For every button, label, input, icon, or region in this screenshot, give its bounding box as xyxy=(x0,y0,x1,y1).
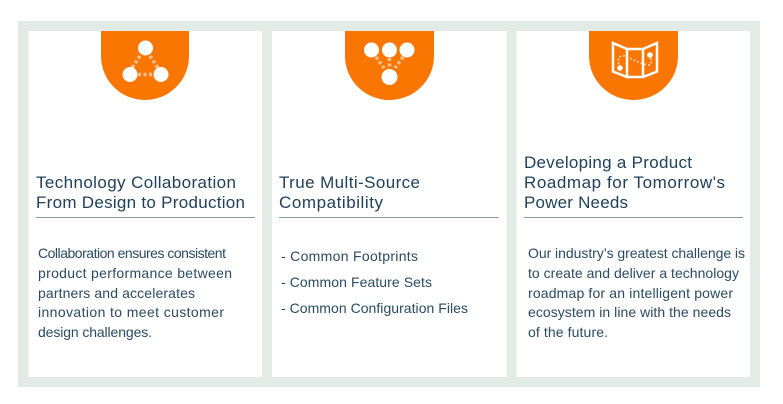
panel: technology collaboration xyxy=(28,31,262,377)
bullet list: - Common Footprints xyxy=(281,248,418,264)
icon: folded map xyxy=(589,31,678,100)
heading: Roadmap for Tomorrow's xyxy=(524,173,725,192)
heading xyxy=(279,173,420,212)
heading xyxy=(36,173,245,212)
bullet list: - Common Configuration Files xyxy=(281,300,468,316)
heading: Technology Collaboration xyxy=(36,173,236,192)
heading xyxy=(524,153,725,212)
icon: three connected circles xyxy=(101,31,189,100)
body text xyxy=(528,245,745,340)
body text: to create and deliver a technology xyxy=(528,265,739,281)
heading: True Multi-Source xyxy=(279,173,420,192)
bullet list xyxy=(281,248,468,316)
body text: partners and accelerates xyxy=(38,285,195,301)
body text: innovation to meet customer xyxy=(38,304,224,320)
body text: roadmap for an intelligent power xyxy=(528,285,733,301)
body text: of the future. xyxy=(528,324,608,340)
body text xyxy=(38,245,232,340)
panel: multi-source compatibility xyxy=(272,31,507,377)
icon: three circles converging to one xyxy=(345,31,434,100)
body text: design challenges. xyxy=(38,324,152,340)
heading: From Design to Production xyxy=(36,193,245,212)
body text: ecosystem in line with the needs xyxy=(528,304,731,320)
body text: product performance between xyxy=(38,265,232,281)
panel: product roadmap xyxy=(516,31,750,377)
heading: Compatibility xyxy=(279,193,384,212)
heading: Power Needs xyxy=(524,193,628,212)
body text: Collaboration ensures consistent xyxy=(38,245,226,261)
bullet list: - Common Feature Sets xyxy=(281,274,432,290)
body text: Our industry’s greatest challenge is xyxy=(528,245,745,261)
heading: Developing a Product xyxy=(524,153,692,172)
